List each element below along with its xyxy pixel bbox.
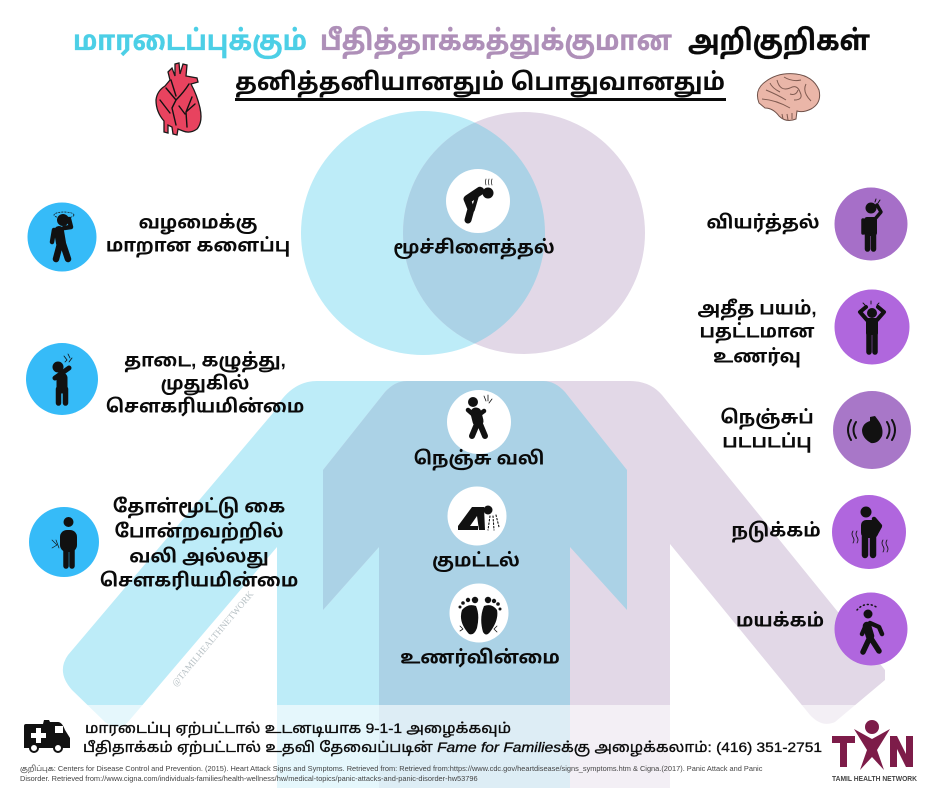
emergency text: மாரடைப்பு ஏற்பட்டால் உடனடியாக 9-1-1 அழைக்கவும் <box>85 720 511 738</box>
venn diagram <box>301 111 645 355</box>
logo: Tamil Health Network: TAMIL HEALTH NETWORK <box>832 774 918 783</box>
symptom: sweating: வியர்த்தல் <box>706 212 820 234</box>
symptom: shortness of breath <box>393 169 555 260</box>
symptom: palpitations <box>720 391 911 469</box>
references <box>20 764 763 783</box>
symptom: nausea: குமட்டல் <box>432 550 520 572</box>
symptom: dizziness <box>736 592 908 666</box>
title: அறிகுறிகள் <box>688 25 870 59</box>
symptom: unusual fatigue: மாறான களைப்பு <box>106 234 290 258</box>
icon: heart <box>156 63 201 135</box>
symptom: palpitations: படபடப்பு <box>722 430 812 454</box>
symptom: jaw, neck, back discomfort: முதுகில் <box>161 372 249 396</box>
subtitle: தனித்தனியானதும் பொதுவானதும் <box>235 69 725 98</box>
emergency text <box>83 720 822 757</box>
symptom: unusual fatigue: வழமைக்கு <box>139 212 258 234</box>
icon: brain <box>757 74 820 120</box>
emergency text: பீதிதாக்கம் ஏற்பட்டால் உதவி தேவைப்படின் Fame for Families க்கு அழைக்கலாம்: (416) 351-2751 <box>83 739 822 757</box>
symptom: numbness: உணர்வின்மை <box>400 646 560 668</box>
symptom: trembling: நடுக்கம் <box>731 520 821 542</box>
symptom: arm discomfort: தோள்மூட்டு கை <box>113 496 285 518</box>
symptom: intense fear: உணர்வு <box>713 346 801 368</box>
symptom: unusual fatigue <box>28 202 290 272</box>
symptom: intense fear: பதட்டமான <box>699 320 815 344</box>
symptom: nausea <box>432 486 520 572</box>
symptom: jaw, neck, back discomfort: தாடை, கழுத்து, <box>124 350 286 372</box>
symptom: chest pain <box>414 390 544 470</box>
footer band <box>0 705 940 788</box>
symptom: dizziness: மயக்கம் <box>736 610 824 630</box>
symptom: arm discomfort: வலி அல்லது <box>129 546 269 568</box>
symptom: numbness <box>400 584 560 668</box>
symptom: jaw, neck, back discomfort: சௌகரியமின்மை <box>106 396 304 416</box>
symptom: trembling <box>731 495 906 569</box>
symptom: intense fear: அதீத பயம், <box>697 298 817 320</box>
references: குறிப்புக: Centers for Disease Control and Prevention. (2015). Heart Attack Signs and Symptoms. Retrieved from: Retrieved from:https://www.cdc.gov/heartdisease/signs_symptoms.htm & Cigna.(2017). Panic Attack and Panic <box>20 764 763 774</box>
icon: ambulance <box>24 720 70 752</box>
symptom: jaw, neck, back discomfort <box>26 343 304 416</box>
symptom: shortness of breath: மூச்சிளைத்தல் <box>393 236 555 260</box>
symptom: arm discomfort: போன்றவற்றில் <box>114 520 284 544</box>
title: பீதித்தாக்கத்துக்குமான <box>320 25 672 59</box>
symptom: sweating <box>706 188 908 260</box>
symptom: chest pain: நெஞ்சு வலி <box>414 448 544 470</box>
symptom: intense fear <box>697 290 910 368</box>
references: Disorder. Retrieved from://www.cigna.com/individuals-families/health-wellness/hw/medical-topics/panic-attacks-and-panic-disorder-hw53796 <box>20 774 478 783</box>
title: மாரடைப்புக்கும் <box>73 25 307 59</box>
body silhouette <box>63 381 885 788</box>
symptom: palpitations: நெஞ்சுப் <box>720 406 814 430</box>
logo: Tamil Health Network <box>832 720 918 783</box>
watermark: @TAMILHEALTHNETWORK <box>171 590 256 689</box>
title <box>73 25 870 59</box>
symptom: arm discomfort <box>29 496 298 590</box>
symptom: arm discomfort: சௌகரியமின்மை <box>100 570 298 590</box>
